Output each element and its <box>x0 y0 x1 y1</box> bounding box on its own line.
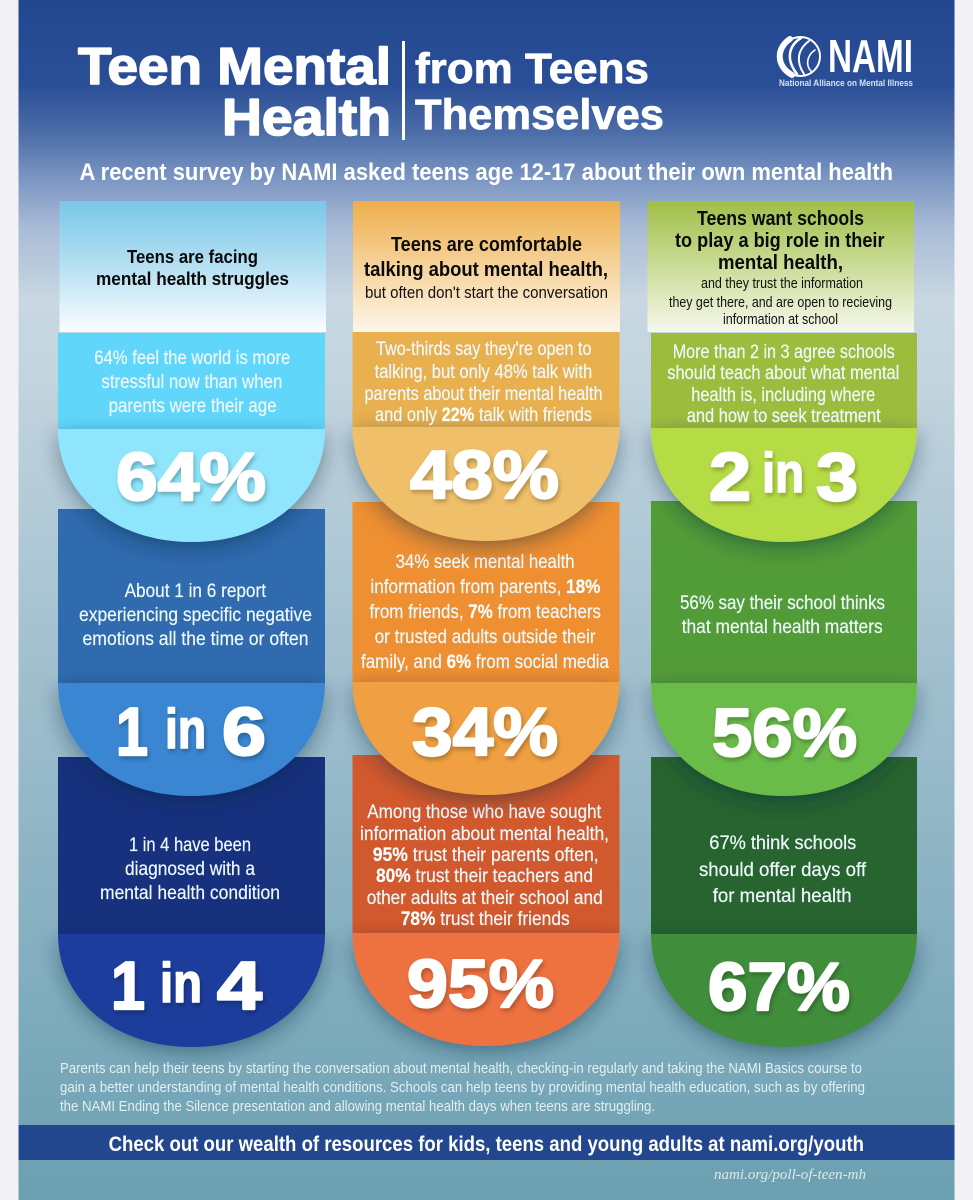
text: trust: other adults at their school and <box>367 888 603 909</box>
panel: column 3 header: they get there, and are open to recieving <box>669 295 892 311</box>
text: talking: and only 22% talk with friends <box>375 405 592 426</box>
text: negative emotions: experiencing specific negative <box>79 605 312 626</box>
text: school thinks: 56% say their school thinks <box>680 593 885 614</box>
text: footer paragraph: the NAMI Ending the Silence presentation and allowing mental health days when teens are struggling. <box>60 1098 655 1115</box>
panel: column 3 header: Teens want schools <box>697 207 864 230</box>
text: diagnosed: 1 in 4 have been <box>129 835 251 856</box>
text: diagnosed <box>100 835 280 904</box>
stat: 67%: 67% <box>708 949 850 1025</box>
text: footer paragraph: gain a better understanding of mental health conditions. Schools can help teens by providing mental health education, such as by offering <box>60 1079 865 1096</box>
text: trust: 78% trust their friends <box>401 909 570 930</box>
subtitle: A recent survey by NAMI asked teens age 12-17 about their own mental health <box>80 159 893 186</box>
title: Teen Mental <box>78 38 391 96</box>
citation: nami.org/poll-of-teen-mh <box>714 1167 866 1183</box>
banner: resources: Check out our wealth of resources for kids, teens and young adults at nami.org/youth <box>109 1133 864 1156</box>
text: information sources <box>361 552 609 673</box>
title: from Teens <box>415 45 649 93</box>
stat: 1 in 4: 1 <box>111 948 145 1024</box>
stat: 56%: 56% <box>712 695 857 771</box>
text: stressful world: stressful now than when <box>101 372 282 393</box>
text: talking <box>364 339 602 426</box>
text: footer paragraph <box>60 1060 865 1115</box>
panel: column 2 header: Teens are comfortable <box>391 233 582 256</box>
text: negative emotions <box>79 581 312 650</box>
stat: 1 in 6: 6 <box>222 694 266 770</box>
stat: 2 in 3: 2 <box>709 439 751 515</box>
text: schools teach: should teach about what mental <box>667 363 899 384</box>
stat: 1 in 6 <box>116 694 266 770</box>
panel: column 3 header: and they trust the information <box>701 276 863 292</box>
panel: column 3 row 3 <box>651 757 917 1047</box>
text: information sources: information from parents, 18% <box>370 577 600 598</box>
text: information sources: from friends, 7% from teachers <box>370 602 601 623</box>
text: schools teach <box>667 342 899 427</box>
panel: column 2 row 1 <box>352 332 620 541</box>
stat: 1 in 4: 4 <box>217 948 262 1024</box>
text: trust: 95% trust their parents often, <box>373 845 599 866</box>
icon: NAMI logo <box>779 30 913 89</box>
text: school thinks <box>680 593 885 638</box>
text: diagnosed: diagnosed with a <box>125 859 255 880</box>
panel: column 3 header: to play a big role in their <box>675 229 885 252</box>
text: days off: for mental health <box>713 886 852 907</box>
text: information sources: 34% seek mental health <box>396 552 575 573</box>
text: information sources: family, and 6% from social media <box>361 652 609 673</box>
text: footer paragraph: Parents can help their teens by starting the conversation about mental health, checking-in regularly and taking the NAMI Basics course to <box>60 1060 862 1077</box>
panel: column 3 row 2 <box>651 501 917 796</box>
panel: column 1 header: Teens are facing <box>127 247 258 267</box>
panel: column 3 header: information at school <box>723 312 838 328</box>
panel: column 1 header: mental health struggles <box>96 269 289 289</box>
stat: 95%: 95% <box>407 946 554 1022</box>
stat: 64%: 64% <box>116 439 266 515</box>
icon: NAMI logo: NAMI <box>828 30 913 82</box>
text: trust: information about mental health, <box>360 824 609 845</box>
text: stressful world <box>94 348 290 417</box>
stat: 34%: 34% <box>412 694 558 770</box>
text: schools teach: health is, including where <box>691 385 875 406</box>
panel: column 3 header <box>648 201 914 332</box>
icon: NAMI logo: National Alliance on Mental Illness <box>779 78 913 89</box>
stat: 1 in 4 <box>111 948 262 1024</box>
panel: column 2 row 3 <box>352 755 620 1046</box>
text: days off: 67% think schools <box>709 833 856 854</box>
stat: 2 in 3 <box>709 439 858 515</box>
panel: column 1 row 3 <box>58 757 325 1047</box>
text: talking: Two-thirds say they're open to <box>376 339 592 360</box>
title <box>78 38 664 147</box>
panel: column 3 header: mental health, <box>718 251 843 274</box>
stat: 2 in 3: 3 <box>816 439 858 515</box>
text: days off <box>699 833 867 907</box>
text: stressful world: 64% feel the world is more <box>94 348 290 369</box>
title: Health <box>222 89 391 147</box>
stat: 1 in 4: in <box>160 951 202 1014</box>
text: talking: parents about their mental health <box>364 384 602 405</box>
text: trust <box>360 802 609 930</box>
text: days off: should offer days off <box>699 860 867 881</box>
text: schools teach: More than 2 in 3 agree schools <box>673 342 895 363</box>
text: information sources: or trusted adults outside their <box>375 627 596 648</box>
panel: column 2 header: but often don't start the conversation <box>365 284 608 302</box>
panel: column 1 row 1 <box>58 333 325 542</box>
text: stressful world: parents were their age <box>109 396 277 417</box>
stat: 1 in 6: 1 <box>116 694 148 770</box>
text: talking: talking, but only 48% talk with <box>375 362 592 383</box>
text: negative emotions: emotions all the time or often <box>82 629 308 650</box>
panel: column 2 row 2 <box>352 502 620 795</box>
text: trust: Among those who have sought <box>367 802 602 823</box>
stat: 2 in 3: in <box>762 441 804 504</box>
text: trust: 80% trust their teachers and <box>376 866 593 887</box>
banner: resources <box>18 1125 954 1160</box>
text: negative emotions: About 1 in 6 report <box>125 581 267 602</box>
stat: 1 in 6: in <box>165 697 206 760</box>
panel: column 2 header <box>353 201 620 332</box>
text: school thinks: that mental health matters <box>682 617 883 638</box>
panel: column 1 row 2 <box>58 509 325 796</box>
stat: 48%: 48% <box>410 437 559 513</box>
panel: column 3 row 1 <box>651 333 917 542</box>
title: Themselves <box>415 91 664 139</box>
text: schools teach: and how to seek treatment <box>687 406 881 427</box>
panel: column 1 header <box>60 201 326 332</box>
panel: column 2 header: talking about mental health, <box>364 258 608 281</box>
text: diagnosed: mental health condition <box>100 883 280 904</box>
